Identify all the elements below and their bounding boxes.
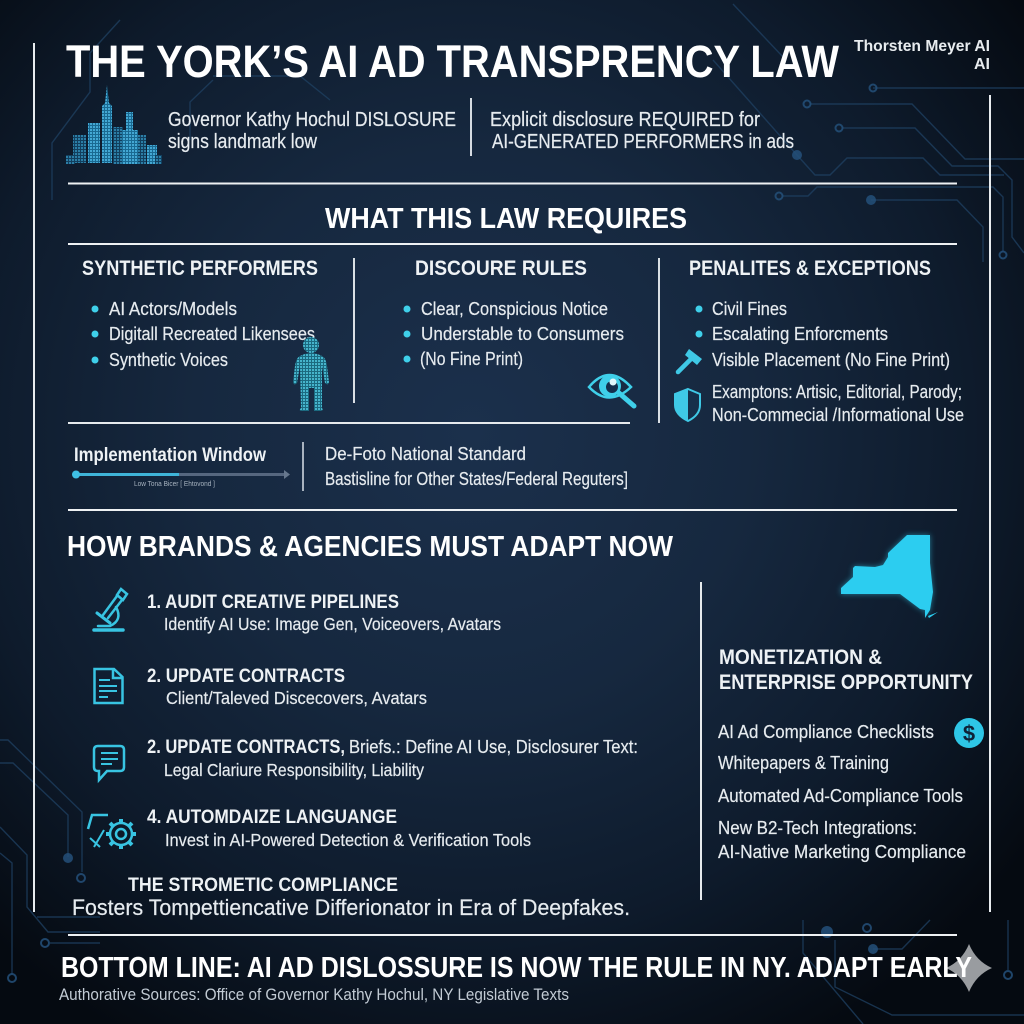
list: performers: Synthetic Voices (109, 349, 228, 370)
icon: dollar coin: $ (963, 721, 975, 746)
step 4: automate (88, 807, 531, 850)
list: performers (92, 298, 315, 370)
heading: synthetic performers: SYNTHETIC PERFORMERS (82, 257, 318, 280)
list: opportunities: Whitepapers & Training (718, 752, 889, 773)
text block: de facto national standard (325, 444, 628, 489)
list: disclosure rules: Understable to Consumers (421, 323, 624, 344)
exemptions text: Non-Commecial /Informational Use (712, 405, 964, 425)
author credit: AI (974, 56, 990, 73)
heading: disclosure rules: DISCOURE RULES (415, 257, 587, 280)
list: disclosure rules: (No Fine Print) (420, 348, 523, 369)
icon: New York state map (841, 535, 938, 618)
step title: 4. AUTOMDAIZE LANGUANGE (147, 807, 397, 828)
icon: document (94, 669, 122, 703)
list: penalties (696, 298, 950, 370)
icon: gavel (678, 349, 702, 372)
author credit: Thorsten Meyer AI (854, 38, 990, 55)
icon: microscope (94, 589, 127, 630)
list: opportunities (718, 721, 966, 862)
icon: dollar coin (954, 718, 984, 748)
panel: adaptation steps (88, 589, 638, 850)
text block: de facto national standard: Bastisline for Other States/Federal Reguters] (325, 469, 628, 489)
panel: implementation window (72, 445, 290, 488)
callout: strategic compliance: THE STROMETIC COMPLIANCE (128, 875, 398, 896)
heading: implementation window: Implementation Window (74, 445, 266, 466)
outer frame lines (34, 43, 990, 912)
panel: disclosure rules (404, 257, 634, 406)
list: penalties: Escalating Enforcments (712, 323, 888, 344)
icon: sparkle watermark (946, 944, 992, 992)
intro text: disclosure requirement: AI-GENERATED PERFORMERS in ads (492, 131, 794, 153)
heading: penalties and exceptions: PENALITES & EXCEPTIONS (689, 257, 931, 280)
heading: how brands and agencies must adapt: HOW BRANDS & AGENCIES MUST ADAPT NOW (67, 531, 674, 563)
callout: strategic compliance (72, 875, 630, 920)
exemptions text (712, 382, 964, 425)
intro text: disclosure requirement: Explicit disclosure REQUIRED for (490, 109, 760, 131)
step title: 2. UPDATE CONTRACTS (147, 666, 345, 687)
panel: monetization and enterprise opportunity (718, 646, 984, 862)
step detail: Legal Clariure Responsibility, Liability (164, 760, 424, 780)
intro text: governor: Governor Kathy Hochul DISLOSURE (168, 109, 456, 131)
timeline caption: Low Tona Bicer [ Ehtovond ] (134, 481, 215, 488)
heading: monetization (719, 646, 973, 694)
list: penalties: Visible Placement (No Fine Print) (712, 349, 950, 370)
panel: synthetic performers (82, 257, 329, 411)
heading: what this law requires: WHAT THIS LAW REQUIRES (325, 203, 687, 235)
list: performers: AI Actors/Models (109, 298, 237, 319)
intro text: disclosure requirement (490, 109, 794, 153)
icon: shield (675, 389, 700, 421)
step title: 2. UPDATE CONTRACTS, (147, 737, 345, 758)
step title continuation: Briefs.: Define AI Use, Disclosurer Text: (349, 736, 638, 757)
icon lines (101, 753, 118, 764)
intro text: governor (168, 109, 456, 153)
callout: strategic compliance: Fosters Tompettiencative Differionator in Era of Deepfakes. (72, 895, 630, 920)
timeline bar (72, 470, 290, 479)
title: THE YORK’S AI AD TRANSPRENCY LAW (66, 36, 839, 87)
list: penalties: Civil Fines (712, 298, 787, 319)
step 2: contracts (94, 666, 427, 708)
icon lines (99, 680, 117, 697)
list: disclosure rules: Clear, Conspicious Notice (421, 298, 608, 319)
icon: gear and circuit (88, 815, 136, 849)
list: disclosure rules (404, 298, 624, 369)
icon: digital person (293, 337, 329, 411)
icon: eye and magnifier (589, 375, 634, 406)
exemptions text: Examptons: Artisic, Editorial, Parody; (712, 382, 962, 402)
list: opportunities: Automated Ad-Compliance Tools (718, 785, 963, 806)
icon: city skyline (66, 85, 162, 164)
panel: penalties and exceptions (675, 257, 964, 425)
step detail: Identify AI Use: Image Gen, Voiceovers, Avatars (164, 614, 501, 634)
intro text: governor: signs landmark low (168, 131, 317, 153)
list: opportunities: New B2-Tech Integrations: (718, 817, 917, 838)
author credit (854, 38, 990, 73)
step 1: audit (94, 589, 501, 634)
list: performers: Digitall Recreated Likensees (109, 323, 315, 344)
step 3: briefs (94, 736, 638, 780)
list: opportunities: AI-Native Marketing Compliance (718, 841, 966, 862)
sources: Authorative Sources: Office of Governor Kathy Hochul, NY Legislative Texts (59, 986, 569, 1004)
step detail: Invest in AI-Powered Detection & Verification Tools (165, 830, 531, 850)
list: opportunities: AI Ad Compliance Checklists (718, 721, 934, 742)
step title: 1. AUDIT CREATIVE PIPELINES (147, 592, 399, 613)
text block: de facto national standard: De-Foto National Standard (325, 444, 526, 464)
step detail: Client/Taleved Discecovers, Avatars (166, 688, 427, 708)
heading: monetization: MONETIZATION & (719, 646, 882, 669)
heading: monetization: ENTERPRISE OPPORTUNITY (719, 671, 973, 694)
icon: speech bubble (94, 746, 124, 780)
